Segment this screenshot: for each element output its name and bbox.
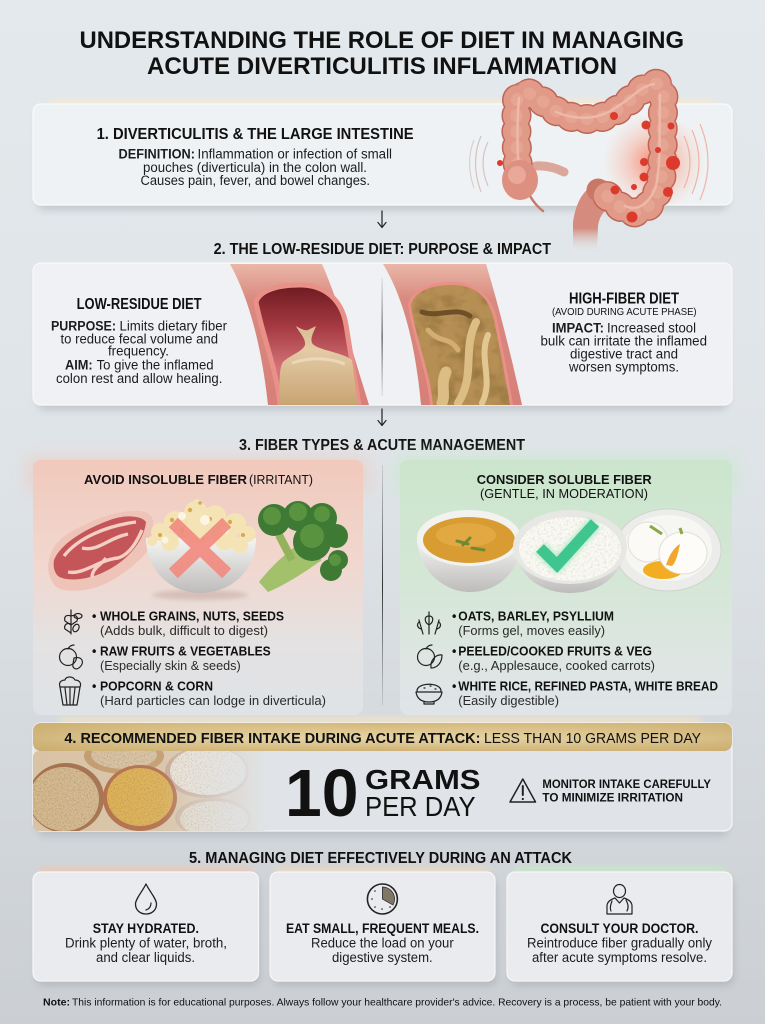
- text: high-fiber diet: worsen symptoms.: [568, 360, 679, 375]
- icon: fruit: [60, 645, 82, 669]
- inflamed spots: [497, 112, 680, 222]
- list: insoluble fiber foods: (Especially skin & seeds): [100, 659, 241, 673]
- divider: [382, 278, 383, 396]
- panel: diverticulitis and the large intestine: [33, 101, 732, 210]
- banner: section 4 heading: LESS THAN 10 GRAMS PER DAY: [484, 731, 701, 747]
- heading: section 3: 3. FIBER TYPES & ACUTE MANAGEMENT: [239, 437, 525, 454]
- callout: monitor intake: MONITOR INTAKE CAREFULLY: [542, 777, 711, 791]
- list: soluble fiber foods: WHITE RICE, REFINED PASTA, WHITE BREAD: [458, 680, 718, 694]
- heading: consider soluble fiber: [477, 472, 652, 501]
- illustration: colon with high-fiber bulk: [383, 264, 522, 405]
- icon: peeled fruit: [418, 645, 442, 668]
- card: eat small frequent meals: EAT SMALL, FREQUENT MEALS.: [286, 921, 479, 936]
- icon: warning triangle: [510, 779, 536, 802]
- text: low-residue diet: AIM:: [65, 358, 93, 373]
- low-residue fluid: [279, 326, 358, 405]
- callout: monitor intake: TO MINIMIZE IRRITATION: [542, 791, 683, 805]
- image: bowl of clear broth: [417, 510, 522, 592]
- text: low-residue diet: to reduce fecal volume and: [60, 332, 218, 347]
- card: eat small frequent meals: Reduce the load on your: [311, 936, 454, 951]
- small intestine stub and appendix: [530, 166, 564, 211]
- card: stay hydrated: and clear liquids.: [96, 950, 195, 965]
- heading: section 1: 1. DIVERTICULITIS & THE LARGE INTESTINE: [97, 126, 414, 143]
- heading: section 2: 2. THE LOW-RESIDUE DIET: PURPOSE & IMPACT: [214, 241, 552, 258]
- heading: section 5: 5. MANAGING DIET EFFECTIVELY DURING AN ATTACK: [189, 850, 573, 867]
- card: stay hydrated: [33, 868, 260, 986]
- title: [80, 27, 684, 80]
- rectum: [573, 184, 614, 252]
- text: high-fiber diet: IMPACT:: [552, 321, 604, 336]
- text: definition: Inflammation or infection of small: [198, 147, 392, 162]
- list: insoluble fiber foods: •: [92, 645, 96, 659]
- list: insoluble fiber foods: RAW FRUITS & VEGETABLES: [100, 645, 271, 659]
- arrow: section 1 to 2: [378, 211, 386, 228]
- text: definition: [118, 147, 392, 188]
- image: plate with poached eggs: [615, 509, 721, 591]
- figure: 10 grams per day: PER DAY: [365, 791, 476, 822]
- panel: recommended fiber intake: [28, 719, 732, 838]
- card: eat small frequent meals: digestive system.: [332, 950, 433, 965]
- text: high-fiber diet: [540, 291, 707, 375]
- text: definition: DEFINITION:: [118, 147, 195, 162]
- list: insoluble fiber foods: WHOLE GRAINS, NUTS, SEEDS: [100, 610, 284, 624]
- text: low-residue diet: colon rest and allow healing.: [56, 371, 222, 386]
- text: low-residue diet: LOW-RESIDUE DIET: [77, 296, 202, 313]
- list: soluble fiber foods: (Easily digestible): [458, 694, 559, 708]
- text: high-fiber diet: Increased stool: [607, 321, 696, 336]
- illustration: large intestine with inflamed diverticula: [470, 84, 708, 252]
- list: soluble fiber foods: PEELED/COOKED FRUITS & VEG: [458, 645, 652, 659]
- text: high-fiber diet: HIGH-FIBER DIET: [569, 291, 679, 308]
- text: high-fiber diet: bulk can irritate the inflamed: [540, 334, 707, 349]
- arrow: section 2 to 3: [378, 409, 386, 426]
- card: consult your doctor: Reintroduce fiber gradually only: [527, 936, 712, 951]
- heading: avoid insoluble fiber: AVOID INSOLUBLE FIBER: [84, 472, 248, 487]
- list: soluble fiber foods: •: [452, 645, 456, 659]
- card: eat small frequent meals: [270, 868, 497, 986]
- image: bowl of white rice: [513, 510, 627, 593]
- image: raw steak: [48, 511, 153, 591]
- text: low-residue diet: PURPOSE:: [51, 319, 116, 334]
- panel: avoid insoluble fiber: [26, 456, 370, 715]
- title: UNDERSTANDING THE ROLE OF DIET IN MANAGING: [80, 27, 684, 54]
- illustration: colon with low residue: [230, 264, 369, 405]
- list: soluble fiber foods: (e.g., Applesauce, cooked carrots): [458, 659, 655, 673]
- image: bowl of popcorn: [146, 499, 256, 600]
- banner: section 4 heading: 4. RECOMMENDED FIBER INTAKE DURING ACUTE ATTACK:: [64, 731, 480, 747]
- icon: grains and seeds: [65, 610, 82, 634]
- list: insoluble fiber foods: •: [92, 610, 96, 624]
- card: stay hydrated: STAY HYDRATED.: [93, 921, 199, 936]
- image: broccoli: [258, 501, 348, 592]
- list: soluble fiber foods: [416, 610, 718, 708]
- card: stay hydrated: Drink plenty of water, broth,: [65, 936, 227, 951]
- icon: clock: [367, 884, 397, 914]
- text: low-residue diet: To give the inflamed: [97, 358, 214, 373]
- list: soluble fiber foods: •: [452, 680, 456, 694]
- figure: 10 grams per day: [285, 756, 480, 831]
- text: low-residue diet: Limits dietary fiber: [120, 319, 227, 334]
- text: high-fiber diet: digestive tract and: [570, 347, 678, 362]
- heading: consider soluble fiber: CONSIDER SOLUBLE FIBER: [477, 472, 652, 487]
- list: soluble fiber foods: (Forms gel, moves easily): [458, 624, 605, 638]
- list: insoluble fiber foods: (Hard particles can lodge in diverticula): [100, 694, 326, 708]
- card: consult your doctor: after acute symptoms resolve.: [532, 950, 707, 965]
- text: high-fiber diet: (AVOID DURING ACUTE PHASE): [552, 306, 697, 318]
- title: ACUTE DIVERTICULITIS INFLAMMATION: [147, 53, 617, 80]
- list: insoluble fiber foods: •: [92, 680, 96, 694]
- icon: oats and barley: [418, 612, 440, 634]
- banner: section 4 heading: [33, 723, 732, 751]
- figure: 10 grams per day: 10: [285, 756, 358, 831]
- list: soluble fiber foods: OATS, BARLEY, PSYLLIUM: [458, 610, 614, 624]
- card: consult your doctor: [507, 868, 734, 986]
- text: low-residue diet: frequency.: [108, 344, 169, 359]
- callout: monitor intake: [542, 777, 711, 805]
- list: insoluble fiber foods: (Adds bulk, difficult to digest): [100, 624, 268, 638]
- heading: consider soluble fiber: (GENTLE, IN MODERATION): [480, 486, 648, 501]
- icon: rice bowl: [416, 684, 442, 704]
- text: definition: Causes pain, fever, and bowel changes.: [140, 173, 370, 188]
- text: low-residue diet: [51, 296, 227, 386]
- icon: water drop: [136, 884, 156, 914]
- divider between fiber panels: [382, 465, 383, 705]
- figure: 10 grams per day: GRAMS: [365, 764, 480, 795]
- icon: popcorn box: [60, 677, 81, 705]
- text: definition: pouches (diverticula) in the colon wall.: [143, 160, 367, 175]
- heading: avoid insoluble fiber: (IRRITANT): [249, 472, 313, 487]
- footer note: Note:: [43, 997, 70, 1009]
- footer note: This information is for educational purposes. Always follow your healthcare provider's advice. Recovery is a process, be patient with your body.: [72, 997, 722, 1009]
- card: consult your doctor: CONSULT YOUR DOCTOR.: [540, 921, 698, 936]
- icon: green check mark: [540, 523, 595, 565]
- image: bowls of grains: [33, 751, 268, 831]
- panel: consider soluble fiber: [395, 456, 737, 715]
- list: insoluble fiber foods: [60, 610, 326, 708]
- icon: doctor: [607, 884, 632, 914]
- list: soluble fiber foods: •: [452, 610, 456, 624]
- list: insoluble fiber foods: POPCORN & CORN: [100, 680, 213, 694]
- colon body: [516, 84, 663, 212]
- panel: low-residue versus high-fiber diet: [33, 263, 732, 410]
- icon: red cross: [178, 527, 222, 569]
